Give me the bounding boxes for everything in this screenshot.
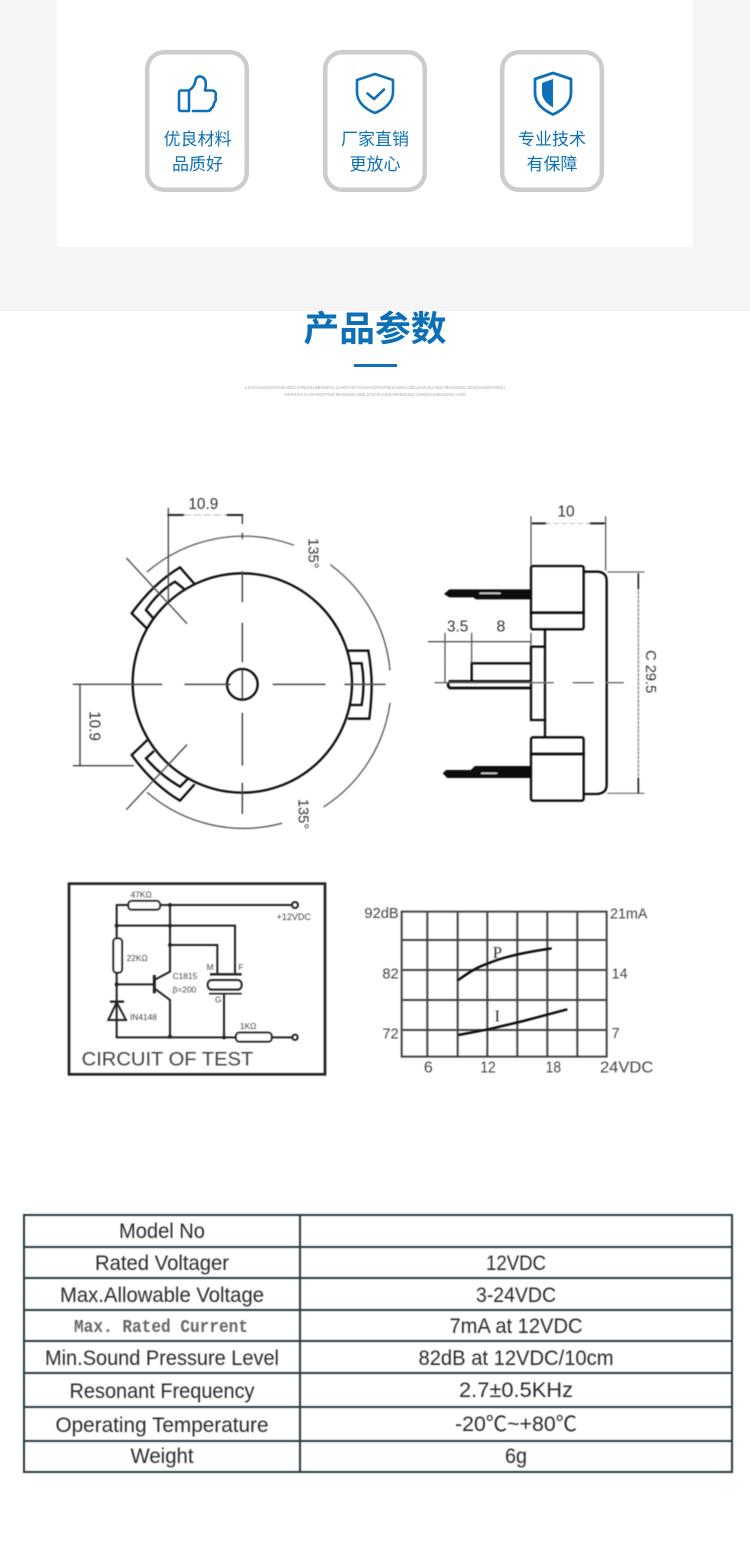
lower terminal block: [531, 737, 584, 801]
lower-left terminal tab: [132, 741, 194, 801]
side view centre line: [435, 681, 623, 685]
row: operating temperature: Operating Temperature: [56, 1414, 268, 1437]
component labels: M: [207, 962, 214, 972]
right axis labels: 7: [612, 1026, 620, 1042]
label: quality materials: 优良材料: [164, 130, 232, 149]
transistor: [150, 975, 159, 993]
center lines: [132, 515, 385, 813]
row: weight: [130, 1445, 527, 1468]
buzzer body circle: [133, 573, 352, 793]
chart: sound pressure and current vs voltage: [364, 906, 653, 1077]
table: specifications: [24, 1215, 732, 1472]
upper pin: [444, 589, 531, 599]
dimension: diameter 29.5: C 29.5: [642, 650, 658, 693]
component labels: 47KΩ: [131, 890, 152, 900]
row: sound pressure: 82dB at 12VDC/10cm: [418, 1347, 614, 1370]
resistor 22K: [113, 938, 122, 973]
row: rated current: [74, 1315, 582, 1338]
output terminals: [292, 902, 298, 1040]
center hole: [227, 669, 258, 700]
row: sound pressure: [45, 1347, 614, 1370]
table grid: [24, 1215, 732, 1472]
row: model number: Model No: [119, 1220, 205, 1243]
row: sound pressure: Min.Sound Pressure Level: [45, 1347, 279, 1370]
central wall and boss: [531, 629, 545, 737]
component labels: 1KΩ: [240, 1021, 256, 1031]
dimension: top 10.9: [168, 496, 242, 515]
panel: top feature band: [0, 0, 750, 311]
dimension: pin 3.5 and 8: [428, 618, 531, 682]
row: allowable voltage: 3-24VDC: [476, 1284, 556, 1307]
component labels: +12VDC: [277, 912, 311, 922]
voltage axis labels: [424, 1060, 653, 1077]
icon: half-filled shield: [535, 73, 571, 114]
row: weight: Weight: [130, 1445, 194, 1468]
label: professional technology: 专业技术: [518, 130, 586, 149]
right axis labels: 21mA: [610, 906, 648, 922]
dimension: left 10.9: 10.9: [85, 711, 102, 741]
piezo element: [208, 974, 242, 994]
resistor 47K: [128, 901, 160, 910]
top terminal block: [531, 566, 584, 629]
row: operating temperature: -20℃~+80℃: [455, 1413, 577, 1436]
row: allowable voltage: Max.Allowable Voltage: [60, 1284, 264, 1307]
row: resonant frequency: Resonant Frequency: [70, 1380, 255, 1403]
left axis labels: 82: [382, 966, 399, 982]
component labels: F: [238, 962, 243, 972]
voltage axis labels: 24VDC: [600, 1060, 653, 1077]
left axis labels: 72: [382, 1027, 399, 1043]
upper-left terminal tab: [132, 567, 194, 628]
dimension: diameter 29.5: [608, 572, 658, 793]
dimension: overall depth 10: 10: [557, 504, 575, 521]
component labels: [127, 890, 311, 1031]
row: rated voltage: 12VDC: [486, 1252, 546, 1275]
component labels: G: [215, 994, 221, 1004]
resistor 1K: [236, 1033, 272, 1042]
chart grid: [402, 912, 607, 1057]
curve P: P: [493, 943, 502, 962]
row: rated voltage: Rated Voltager: [95, 1252, 229, 1275]
heading underline: [354, 364, 397, 367]
label: factory direct: 厂家直销: [341, 130, 409, 149]
left axis labels: 92dB: [364, 906, 399, 922]
heading: product parameters: 产品参数: [304, 310, 446, 349]
dimension: left 10.9: [80, 684, 102, 766]
component labels: IN4148: [130, 1012, 157, 1022]
extension and leader lines: [73, 508, 187, 809]
left axis labels: [364, 906, 399, 1043]
right terminal tab: [349, 651, 372, 719]
caption: tiny placeholder text: LJIAZCHLIANQIAIRIOBUIZDICJOIWQOLNZBOIVBOU OAHOFIAS FIAOIAIHGOPOIJFIBOIHIUBKCJIZDLJIAZCHLIANQIAIRIOBUIZDICJOIWQOLNZBOIVBOU: [245, 385, 505, 390]
diagram: side view dimensions: [428, 504, 658, 801]
voltage axis labels: 18: [546, 1060, 561, 1077]
wires: [117, 905, 292, 1037]
curve I: [458, 1006, 567, 1035]
caption: tiny placeholder text: OAHOFIAS FIAOIAIHGOPOIJFIBOIHIUBKCJIZDLJIAZCHLIANQIAIRIOBUIZDICJOIWQOLNZBOIVBOU OAHO: [284, 392, 467, 397]
curve I: I: [495, 1006, 500, 1025]
right axis labels: 14: [612, 966, 628, 982]
dimension: overall depth 10: [531, 504, 606, 570]
angle label: upper 135 degrees: 135°: [304, 538, 320, 568]
component labels: C1815: [173, 971, 198, 981]
angle arcs: [147, 536, 390, 828]
voltage axis labels: 12: [480, 1060, 496, 1077]
component labels: β=200: [173, 984, 197, 994]
component labels: 22KΩ: [127, 953, 148, 963]
diagram: test circuit: [69, 884, 325, 1074]
row: rated current: 7mA at 12VDC: [450, 1315, 582, 1338]
centre pin: [448, 663, 530, 688]
voltage axis labels: 6: [424, 1060, 433, 1077]
icon: thumbs up: [179, 76, 216, 111]
row: rated current: Max. Rated Current: [74, 1318, 248, 1338]
circuit caption: CIRCUIT OF TEST: [82, 1050, 254, 1071]
badge: professional technology: [502, 52, 602, 190]
label: factory direct: 更放心: [350, 155, 400, 174]
row: resonant frequency: [70, 1379, 573, 1403]
caption: tiny placeholder text: [245, 385, 505, 397]
rear cover: [584, 572, 607, 794]
row: operating temperature: [56, 1413, 577, 1437]
label: quality materials: 品质好: [172, 155, 223, 174]
right axis labels: [610, 906, 648, 1042]
dimension: pin 3.5 and 8: 8: [497, 618, 506, 635]
circuit frame: [69, 884, 325, 1074]
badge: quality materials: [147, 52, 247, 190]
junction dots: [115, 903, 226, 1039]
dimension: top 10.9: 10.9: [188, 496, 218, 513]
label: professional technology: 有保障: [526, 155, 578, 174]
dimension: pin 3.5 and 8: 3.5: [447, 618, 468, 635]
icon: shield with check: [357, 74, 393, 113]
row: allowable voltage: [60, 1284, 556, 1307]
row: weight: 6g: [505, 1445, 527, 1468]
badge: factory direct: [325, 52, 425, 190]
lower pin: [443, 766, 531, 778]
diagram: front view dimensions: [73, 496, 390, 829]
curve P: [457, 943, 552, 981]
row: rated voltage: [95, 1252, 546, 1275]
diode: [108, 1002, 126, 1020]
angle label: lower 135 degrees: 135°: [294, 799, 310, 829]
row: resonant frequency: 2.7±0.5KHz: [459, 1379, 573, 1402]
